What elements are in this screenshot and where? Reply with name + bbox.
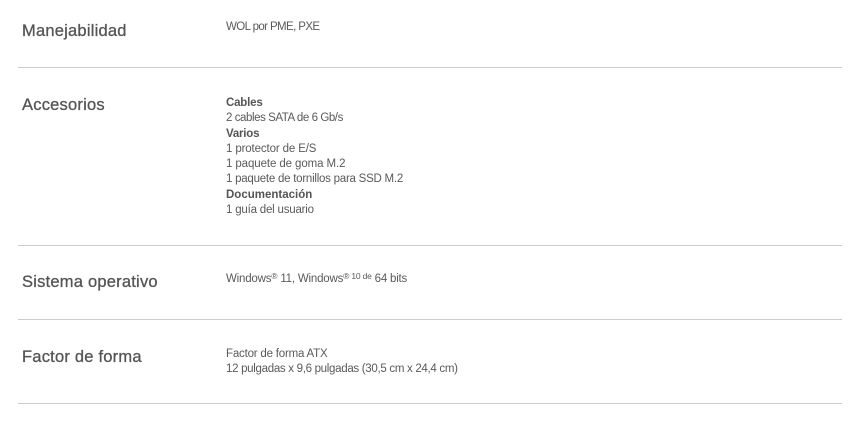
- text: Accesorios list: 1 paquete de goma M.2: [226, 158, 345, 170]
- heading: Accesorios: Accesorios: [22, 96, 105, 114]
- text: Factor de forma value: 12 pulgadas x 9,6 pulgadas (30,5 cm x 24,4 cm): [226, 363, 458, 375]
- text: Accesorios list: 1 guía del usuario: [226, 204, 314, 216]
- panel: Factor de forma row: [22, 348, 458, 375]
- panel: Accesorios row: [22, 96, 403, 216]
- text: Factor de forma value: [226, 348, 458, 375]
- text: Accesorios list: [226, 97, 403, 216]
- heading: Factor de forma: Factor de forma: [22, 348, 142, 366]
- panel: Sistema operativo row: [22, 271, 407, 291]
- text: Accesorios list: 1 paquete de tornillos para SSD M.2: [226, 173, 403, 185]
- text: Factor de forma value: Factor de forma ATX: [226, 348, 327, 360]
- text: Accesorios list: Cables: [226, 97, 263, 109]
- text: Accesorios list: 1 protector de E/S: [226, 143, 316, 155]
- text: Accesorios list: 2 cables SATA de 6 Gb/s: [226, 112, 343, 124]
- text: Accesorios list: Documentación: [226, 189, 312, 201]
- heading: Sistema operativo: Sistema operativo: [22, 273, 158, 291]
- text: Manejabilidad value: WOL por PME, PXE: [226, 21, 320, 33]
- text: Sistema operativo value: Windows® 11, Windows® 10 de 64 bits: [226, 271, 407, 285]
- panel: Manejabilidad row: [22, 21, 320, 40]
- text: Accesorios list: Varios: [226, 128, 259, 140]
- heading: Manejabilidad: Manejabilidad: [22, 22, 127, 40]
